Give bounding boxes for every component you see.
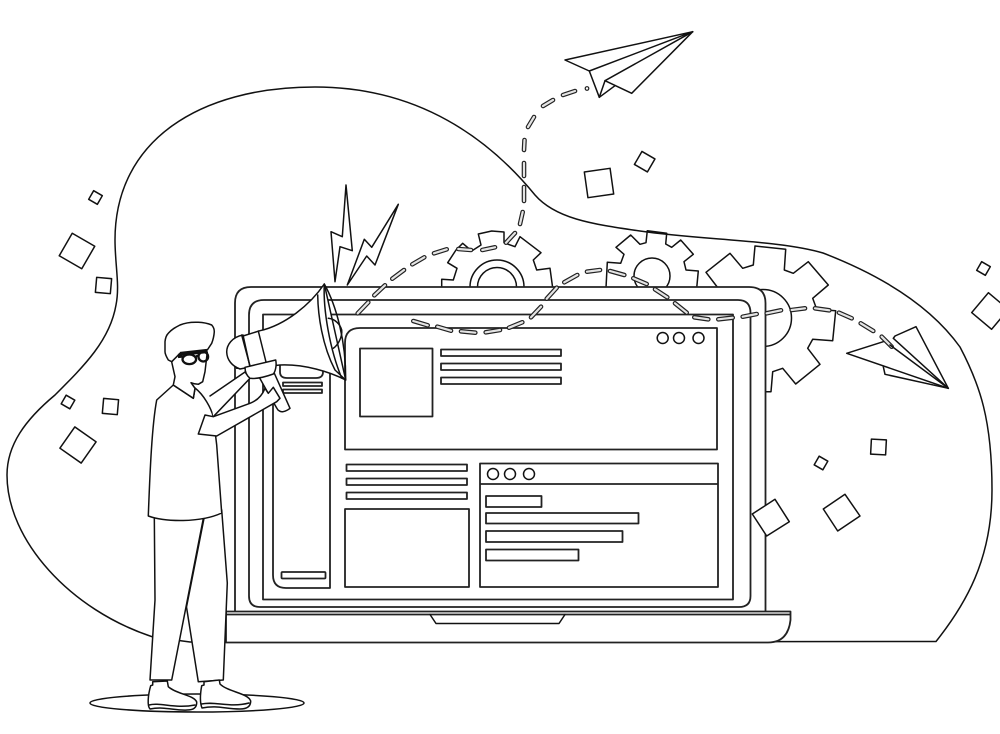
paper plane: top: [565, 32, 693, 97]
head and face: [165, 322, 214, 398]
megaphone rim: [318, 284, 346, 380]
glasses: [178, 350, 208, 364]
background blob: [7, 87, 992, 642]
megaphone speaker dome: [328, 318, 342, 348]
laptop bezel: [249, 300, 750, 607]
lower left content block: [345, 464, 469, 587]
shoes: [148, 680, 251, 710]
laptop base: [226, 612, 790, 642]
collar: [173, 383, 195, 398]
top content panel: [345, 328, 717, 450]
megaphone handle: [258, 371, 290, 412]
megaphone bands: [242, 331, 266, 366]
ground shadow ellipse: [90, 694, 304, 712]
dashed flight path: top plane: [358, 87, 589, 313]
gear: middle: [606, 231, 698, 294]
laptop: [226, 287, 790, 642]
gear: right large: [706, 246, 836, 392]
paper plane: right: [847, 327, 948, 388]
torso shirt: [148, 385, 222, 521]
laptop lid outer: [235, 287, 766, 612]
trousers: [150, 510, 227, 682]
person with megaphone: [148, 284, 346, 710]
megaphone rear cap: [227, 335, 250, 369]
megaphone: [227, 284, 346, 412]
raised upper arm: [210, 372, 250, 417]
gear: left: [442, 231, 553, 314]
dashed flight path: right plane: [413, 270, 892, 347]
sidebar: [273, 362, 330, 588]
laptop screen: [263, 314, 733, 600]
lightning bolts: [331, 185, 398, 285]
forearm and sleeve: [198, 387, 280, 436]
megaphone bell: [237, 284, 346, 380]
megaphone grip: [245, 360, 276, 378]
lower right window panel: [480, 464, 718, 587]
floating squares: [59, 151, 1000, 536]
